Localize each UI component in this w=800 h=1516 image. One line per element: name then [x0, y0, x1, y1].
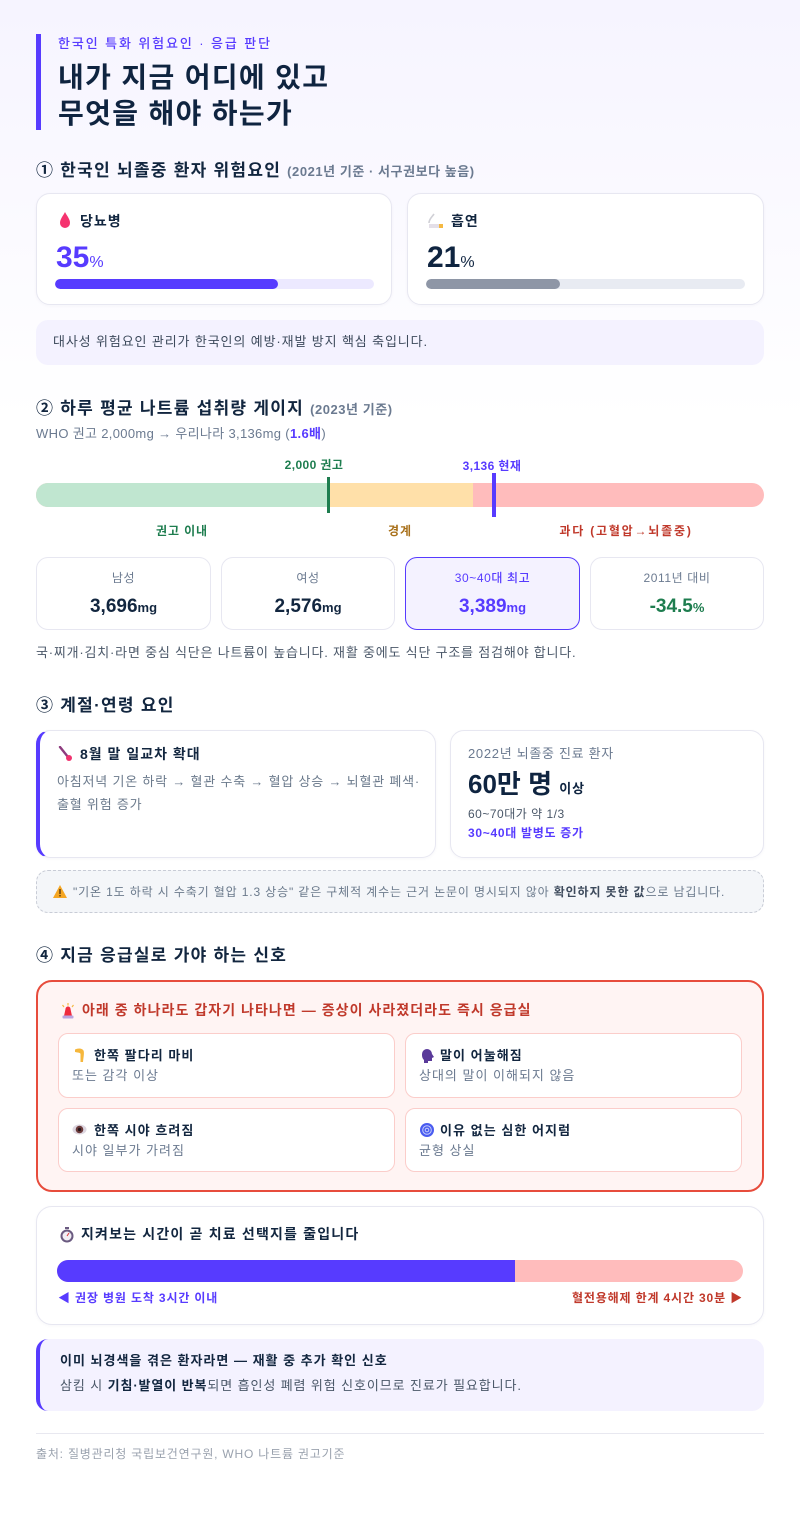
gauge subtitle: WHO 권고 2,000mg → 우리나라 3,136mg (1.6배) — [36, 426, 326, 441]
panel title: 지켜보는 시간이 곧 치료 선택지를 줄입니다 — [81, 1226, 359, 1242]
icon: leg — [75, 1048, 84, 1062]
callout text: "기온 1도 하락 시 수축기 혈압 1.3 상승" 같은 구체적 계수는 근거 논문이 명시되지 않아 확인하지 못한 값으로 남깁니다. — [73, 885, 725, 899]
panel title: 8월 말 일교차 확대 — [80, 746, 201, 762]
signal: speech — [405, 1033, 742, 1098]
panel: smoking — [407, 193, 764, 305]
progress bar — [426, 279, 745, 289]
icon: siren — [62, 1003, 74, 1018]
label: arrival: ◀ 권장 병원 도착 3시간 이내 — [58, 1291, 218, 1305]
panel text: 출혈 위험 증가 — [57, 797, 142, 812]
sodium gauge — [36, 458, 764, 538]
marker: 3136 — [492, 473, 496, 517]
marker: 2000 — [327, 477, 330, 513]
icon: cigarette — [428, 214, 443, 228]
label: limit: 혈전용해제 한계 4시간 30분 ▶ — [572, 1291, 743, 1305]
signal: vision — [58, 1108, 395, 1172]
panel text: 아침저녁 기온 하락 → 혈관 수축 → 혈압 상승 → 뇌혈관 폐색· — [57, 774, 420, 789]
value: 21% — [427, 241, 475, 274]
zone label: excess: 과다 (고혈압→뇌졸중) — [559, 524, 693, 538]
text: diet note: 국·찌개·김치·라면 중심 식단은 나트륨이 높습니다. 재활 중에도 식단 구조를 점검해야 합니다. — [36, 645, 576, 660]
signal: speech: 상대의 말이 이해되지 않음 — [419, 1068, 575, 1083]
signal: limb: 또는 감각 이상 — [72, 1068, 159, 1083]
signal: speech: 말이 어눌해짐 — [440, 1048, 523, 1063]
callout text: 삼킴 시 기침·발열이 반복되면 흡인성 폐렴 위험 신호이므로 진료가 필요합니다. — [60, 1378, 522, 1393]
title — [58, 62, 329, 129]
signal: dizziness: 이유 없는 심한 어지럼 — [440, 1123, 571, 1138]
callout title: 이미 뇌경색을 겪은 환자라면 — 재활 중 추가 확인 신호 — [60, 1353, 388, 1368]
title: 내가 지금 어디에 있고 — [58, 62, 329, 93]
signal: dizziness — [405, 1108, 742, 1172]
panel: diabetes — [36, 193, 392, 305]
icon: spiral — [420, 1123, 434, 1137]
stat: female: 2,576mg — [274, 596, 342, 617]
stat: 30-40s — [405, 557, 580, 630]
callout: unverified value — [36, 870, 764, 913]
icon: eye — [72, 1124, 86, 1134]
icon: speaking head — [422, 1049, 434, 1063]
value: 60만 명 이상 — [468, 769, 585, 799]
stat: 30-40s: 3,389mg — [459, 596, 526, 617]
age highlight: 30~40대 발병도 증가 — [468, 826, 584, 840]
stat: male: 남성 — [112, 571, 135, 585]
stat: 30-40s: 30~40대 최고 — [455, 571, 530, 585]
stat: female: 여성 — [296, 571, 320, 585]
label: 당뇨병 — [80, 213, 122, 229]
value: 35% — [56, 241, 104, 274]
gauge bar — [36, 483, 764, 507]
stat: male — [36, 557, 211, 630]
icon: stopwatch — [60, 1227, 74, 1242]
signal: limb — [58, 1033, 395, 1098]
signal: limb: 한쪽 팔다리 마비 — [94, 1048, 194, 1063]
stat: male: 3,696mg — [90, 596, 157, 617]
footer: source: 출처: 질병관리청 국립보건연구원, WHO 나트륨 권고기준 — [36, 1447, 345, 1461]
stat: female — [221, 557, 395, 630]
zone label: border: 경계 — [388, 524, 412, 538]
footer: source — [36, 1433, 764, 1465]
heading: section 3: ③ 계절·연령 요인 — [36, 696, 175, 715]
panel: patient count — [450, 730, 764, 858]
page background — [0, 0, 800, 420]
icon: warning — [53, 885, 67, 898]
heading: section 2: ② 하루 평균 나트륨 섭취량 게이지 (2023년 기준) — [36, 399, 393, 418]
label: 흡연 — [451, 213, 479, 229]
stat: vs 2011: -34.5% — [650, 596, 704, 617]
panel text — [57, 774, 420, 812]
kicker: 한국인 특화 위험요인 · 응급 판단 — [58, 36, 272, 51]
callout: rehab signal — [36, 1339, 764, 1411]
header — [36, 34, 436, 130]
title: 무엇을 해야 하는가 — [58, 98, 293, 129]
signal: vision: 한쪽 시야 흐려짐 — [94, 1123, 194, 1138]
stat: vs 2011: 2011년 대비 — [643, 571, 711, 585]
signal: dizziness: 균형 상실 — [419, 1143, 475, 1158]
panel: emergency signals — [36, 980, 764, 1192]
panel: time window — [36, 1206, 764, 1325]
signal: vision: 시야 일부가 가려짐 — [72, 1143, 185, 1158]
panel: temperature range — [36, 730, 436, 858]
time bar — [57, 1260, 743, 1282]
callout: metabolic — [36, 320, 764, 365]
marker label: current: 3,136 현재 — [463, 459, 521, 473]
icon: thermometer — [58, 746, 72, 761]
zone label: within: 권고 이내 — [156, 524, 208, 538]
heading: section 4: ④ 지금 응급실로 가야 하는 신호 — [36, 946, 287, 965]
progress bar — [55, 279, 374, 289]
marker label: recommended: 2,000 권고 — [285, 458, 343, 472]
callout: metabolic: 대사성 위험요인 관리가 한국인의 예방·재발 방지 핵심 축입니다. — [53, 334, 428, 349]
heading: section 1: ① 한국인 뇌졸중 환자 위험요인 (2021년 기준 · 서구권보다 높음) — [36, 161, 475, 180]
label: 2022년 뇌졸중 진료 환자 — [468, 746, 614, 761]
age note: 60~70대가 약 1/3 — [468, 807, 565, 821]
icon: blood drop — [60, 212, 70, 228]
stat: vs 2011 — [590, 557, 764, 630]
panel title: 아래 중 하나라도 갑자기 나타나면 — 증상이 사라졌더라도 즉시 응급실 — [82, 1002, 532, 1018]
